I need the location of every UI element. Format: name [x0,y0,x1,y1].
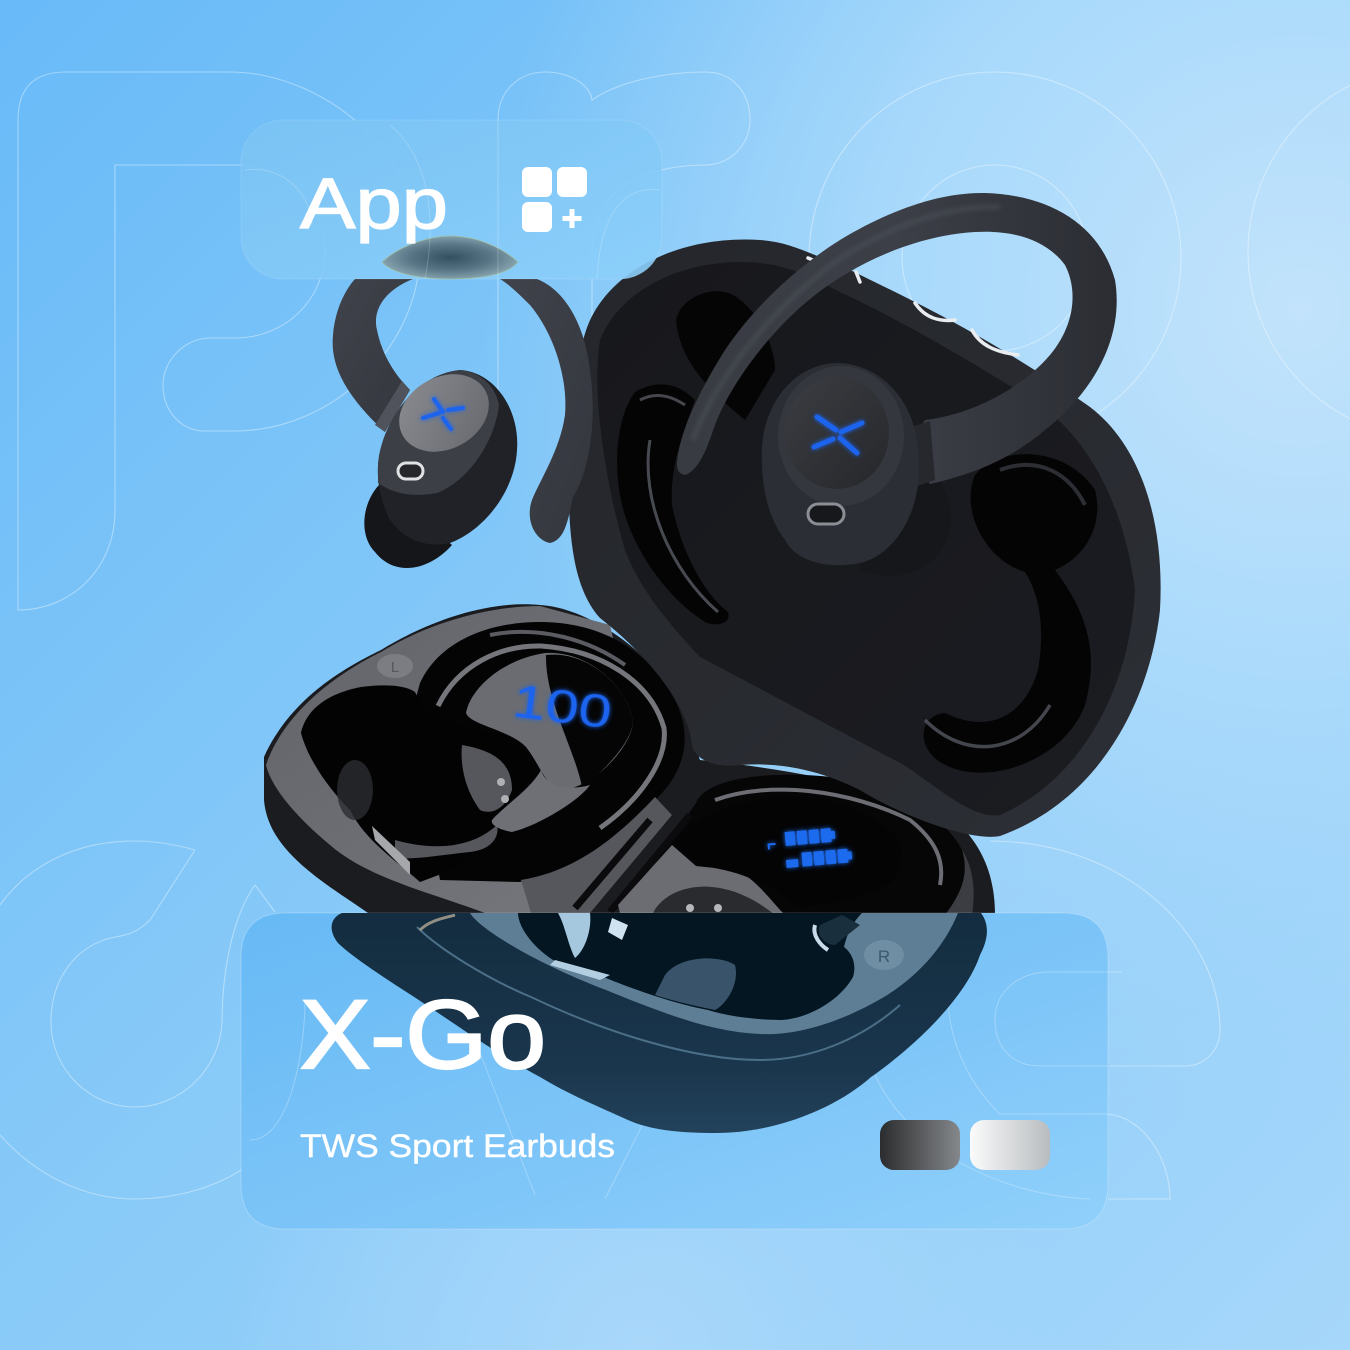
white lettering on lid edge [808,258,1018,355]
lid cavity: left groove [617,384,729,624]
ear tip [364,482,452,568]
right cavity ring [654,774,965,913]
earbud body [378,370,517,544]
glass panel: product [241,913,1122,1229]
gloss highlight around display [438,646,664,828]
lower case seen through glass: R [878,947,890,966]
earbud body [762,363,919,565]
charging port [398,463,423,479]
outer gloss ring [410,622,685,882]
ear hook [677,193,1117,484]
circular L mark [377,654,413,678]
earbud face [386,359,502,467]
circular R mark [864,940,904,970]
icon: blue X [814,417,862,453]
panel outlines [250,972,1122,1199]
heading: App: App [300,165,448,244]
glossy highlights [558,913,590,958]
ear tip [860,455,951,576]
subtitle: TWS Sport Earbuds [300,1128,615,1164]
case base [264,604,995,915]
glass panel: App [241,120,662,279]
case base: L [391,659,399,676]
lid cavity: top [676,291,775,420]
colour swatch: black [880,1120,960,1170]
right display [712,868,749,878]
icon: blue X [423,399,463,429]
icon: app grid with plus [522,167,587,232]
battery readout 100: 100 [510,674,615,738]
earbud charging pins [652,887,775,915]
right earbud [677,193,1117,576]
panel outlines [245,120,660,279]
left earbud [333,279,593,568]
display panel [466,653,633,790]
battery indicators [767,826,852,869]
central spine [521,797,672,913]
colour swatch: white [970,1120,1050,1170]
product: earbuds and charging case [264,193,1161,915]
lower case seen through glass [332,913,987,1133]
left earbud cavity [301,685,439,882]
earbud face [785,377,889,489]
hook collar [905,421,935,490]
charging port [808,504,844,524]
blurred earbud hook reflection [382,236,518,279]
case lid [569,240,1161,837]
ear hook [333,279,413,432]
lid cavity: right groove [924,454,1097,773]
heading: X-Go: X-Go [300,980,546,1089]
